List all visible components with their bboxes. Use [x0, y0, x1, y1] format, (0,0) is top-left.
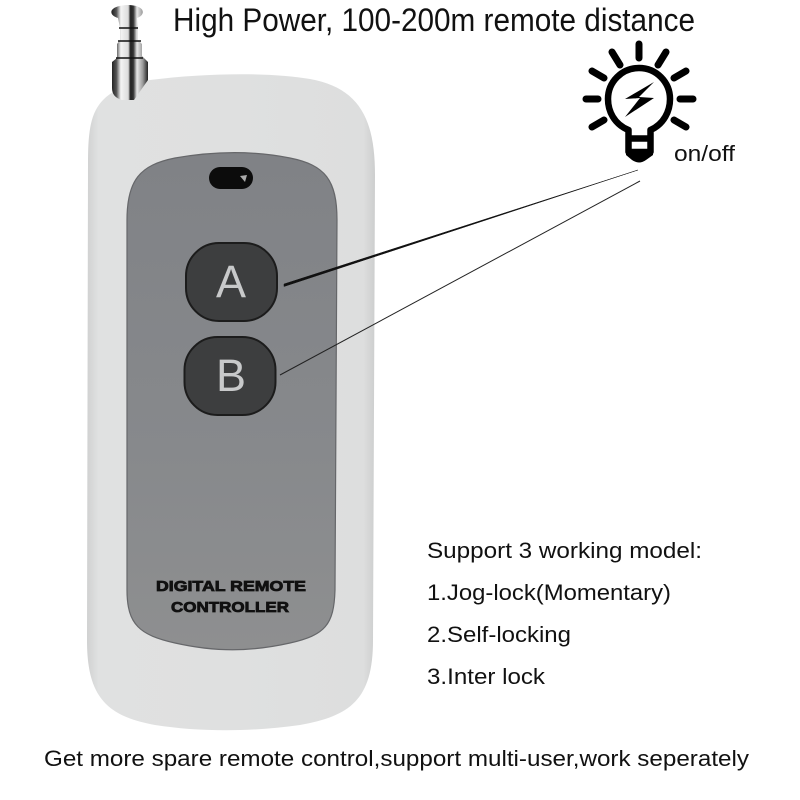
lightning bolt — [625, 82, 654, 117]
front panel — [127, 153, 337, 650]
connector line B — [280, 181, 640, 375]
working modes text: 1.Jog-lock(Momentary) — [427, 580, 671, 605]
product label: DIGITAL REMOTE — [156, 578, 306, 595]
button A — [186, 243, 277, 321]
button A: A — [216, 256, 246, 307]
product label: CONTROLLER — [171, 599, 289, 616]
working modes text: 3.Inter lock — [427, 664, 546, 689]
antenna — [111, 5, 148, 100]
title: High Power, 100-200m remote distance — [173, 2, 695, 38]
product label — [156, 578, 306, 616]
icon: light bulb — [586, 44, 693, 162]
button B: B — [216, 350, 246, 401]
remote body — [87, 74, 375, 730]
working modes text: 2.Self-locking — [427, 622, 571, 647]
working modes text — [427, 538, 702, 689]
footer text: Get more spare remote control,support multi-user,work seperately — [44, 746, 749, 771]
working modes text: Support 3 working model: — [427, 538, 702, 563]
on/off label: on/off — [674, 141, 736, 166]
connector line A — [284, 170, 638, 286]
button B — [184, 337, 276, 415]
remote control — [87, 5, 375, 730]
indicator light — [209, 167, 253, 189]
